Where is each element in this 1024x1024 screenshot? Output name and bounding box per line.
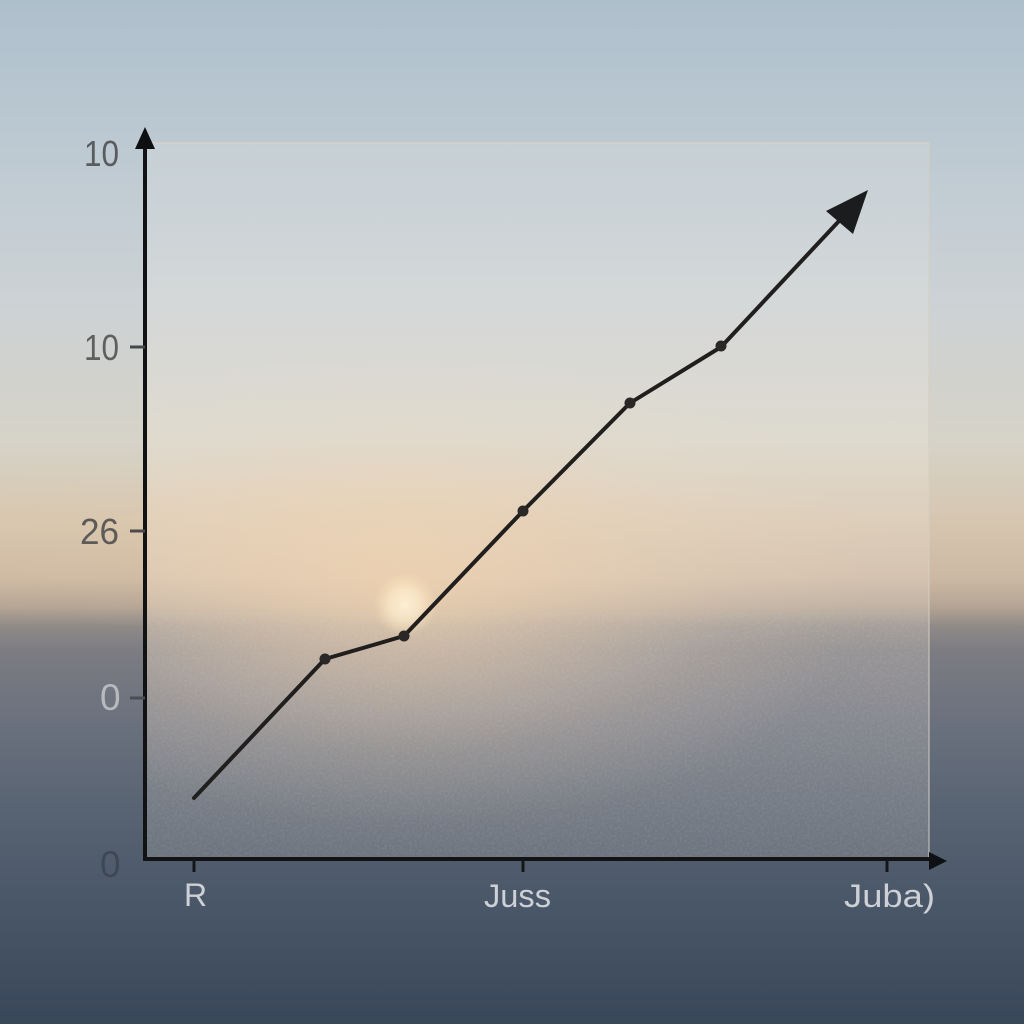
y axis with arrowhead and ticks bbox=[130, 127, 155, 861]
line chart: rising trend with data points bbox=[194, 190, 868, 798]
x axis labels bbox=[184, 877, 935, 914]
y axis labels: 0 bbox=[100, 844, 121, 885]
x axis with arrowhead and ticks bbox=[143, 852, 947, 872]
y axis labels bbox=[80, 133, 121, 885]
y axis labels: 10 bbox=[84, 327, 119, 368]
y axis labels: 26 bbox=[80, 511, 119, 552]
icon: setting sun bbox=[373, 573, 437, 637]
y axis labels: 0 bbox=[100, 677, 121, 718]
x axis labels: Juss bbox=[484, 878, 551, 914]
icon: trend arrowhead bbox=[826, 190, 868, 234]
x axis labels: R bbox=[184, 877, 207, 913]
x axis labels: Juba) bbox=[844, 878, 935, 914]
y axis labels: 10 bbox=[84, 133, 119, 174]
panel: translucent chart plate bbox=[147, 143, 929, 857]
